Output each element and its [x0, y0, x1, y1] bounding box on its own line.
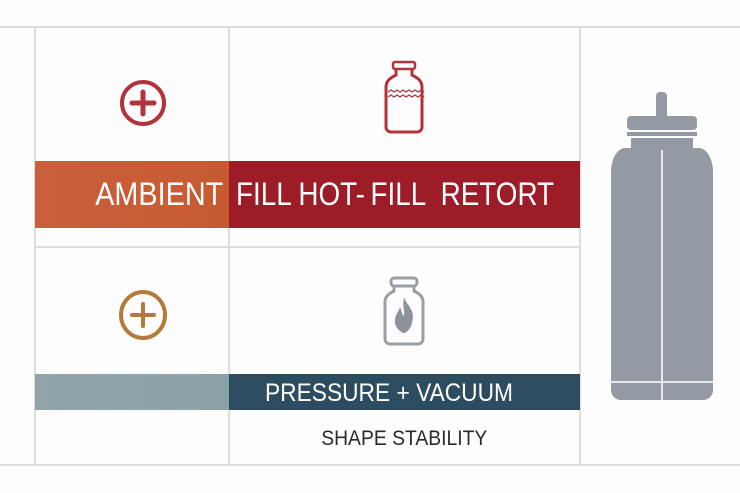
band: pressure + vacuum: PRESSURE + VACUUM: [265, 379, 513, 407]
icon: bottle with waves: [384, 60, 424, 134]
icon: jar with flame: [384, 276, 424, 346]
band: hot-fill retort: FILL HOT- FILL RETORT: [236, 176, 554, 212]
grid lines: [0, 26, 740, 28]
band: ambient: AMBIENT: [95, 176, 223, 212]
icon: brown plus circle: [119, 290, 167, 340]
band: hot-fill retort: [229, 161, 580, 228]
band: ambient: [35, 161, 229, 228]
icon: large grey bottle: [611, 92, 713, 400]
band: pressure + vacuum: [229, 374, 580, 410]
band: pale teal: [35, 374, 229, 410]
icon: red plus circle: [120, 80, 166, 126]
text: shape stability: SHAPE STABILITY: [321, 427, 488, 450]
